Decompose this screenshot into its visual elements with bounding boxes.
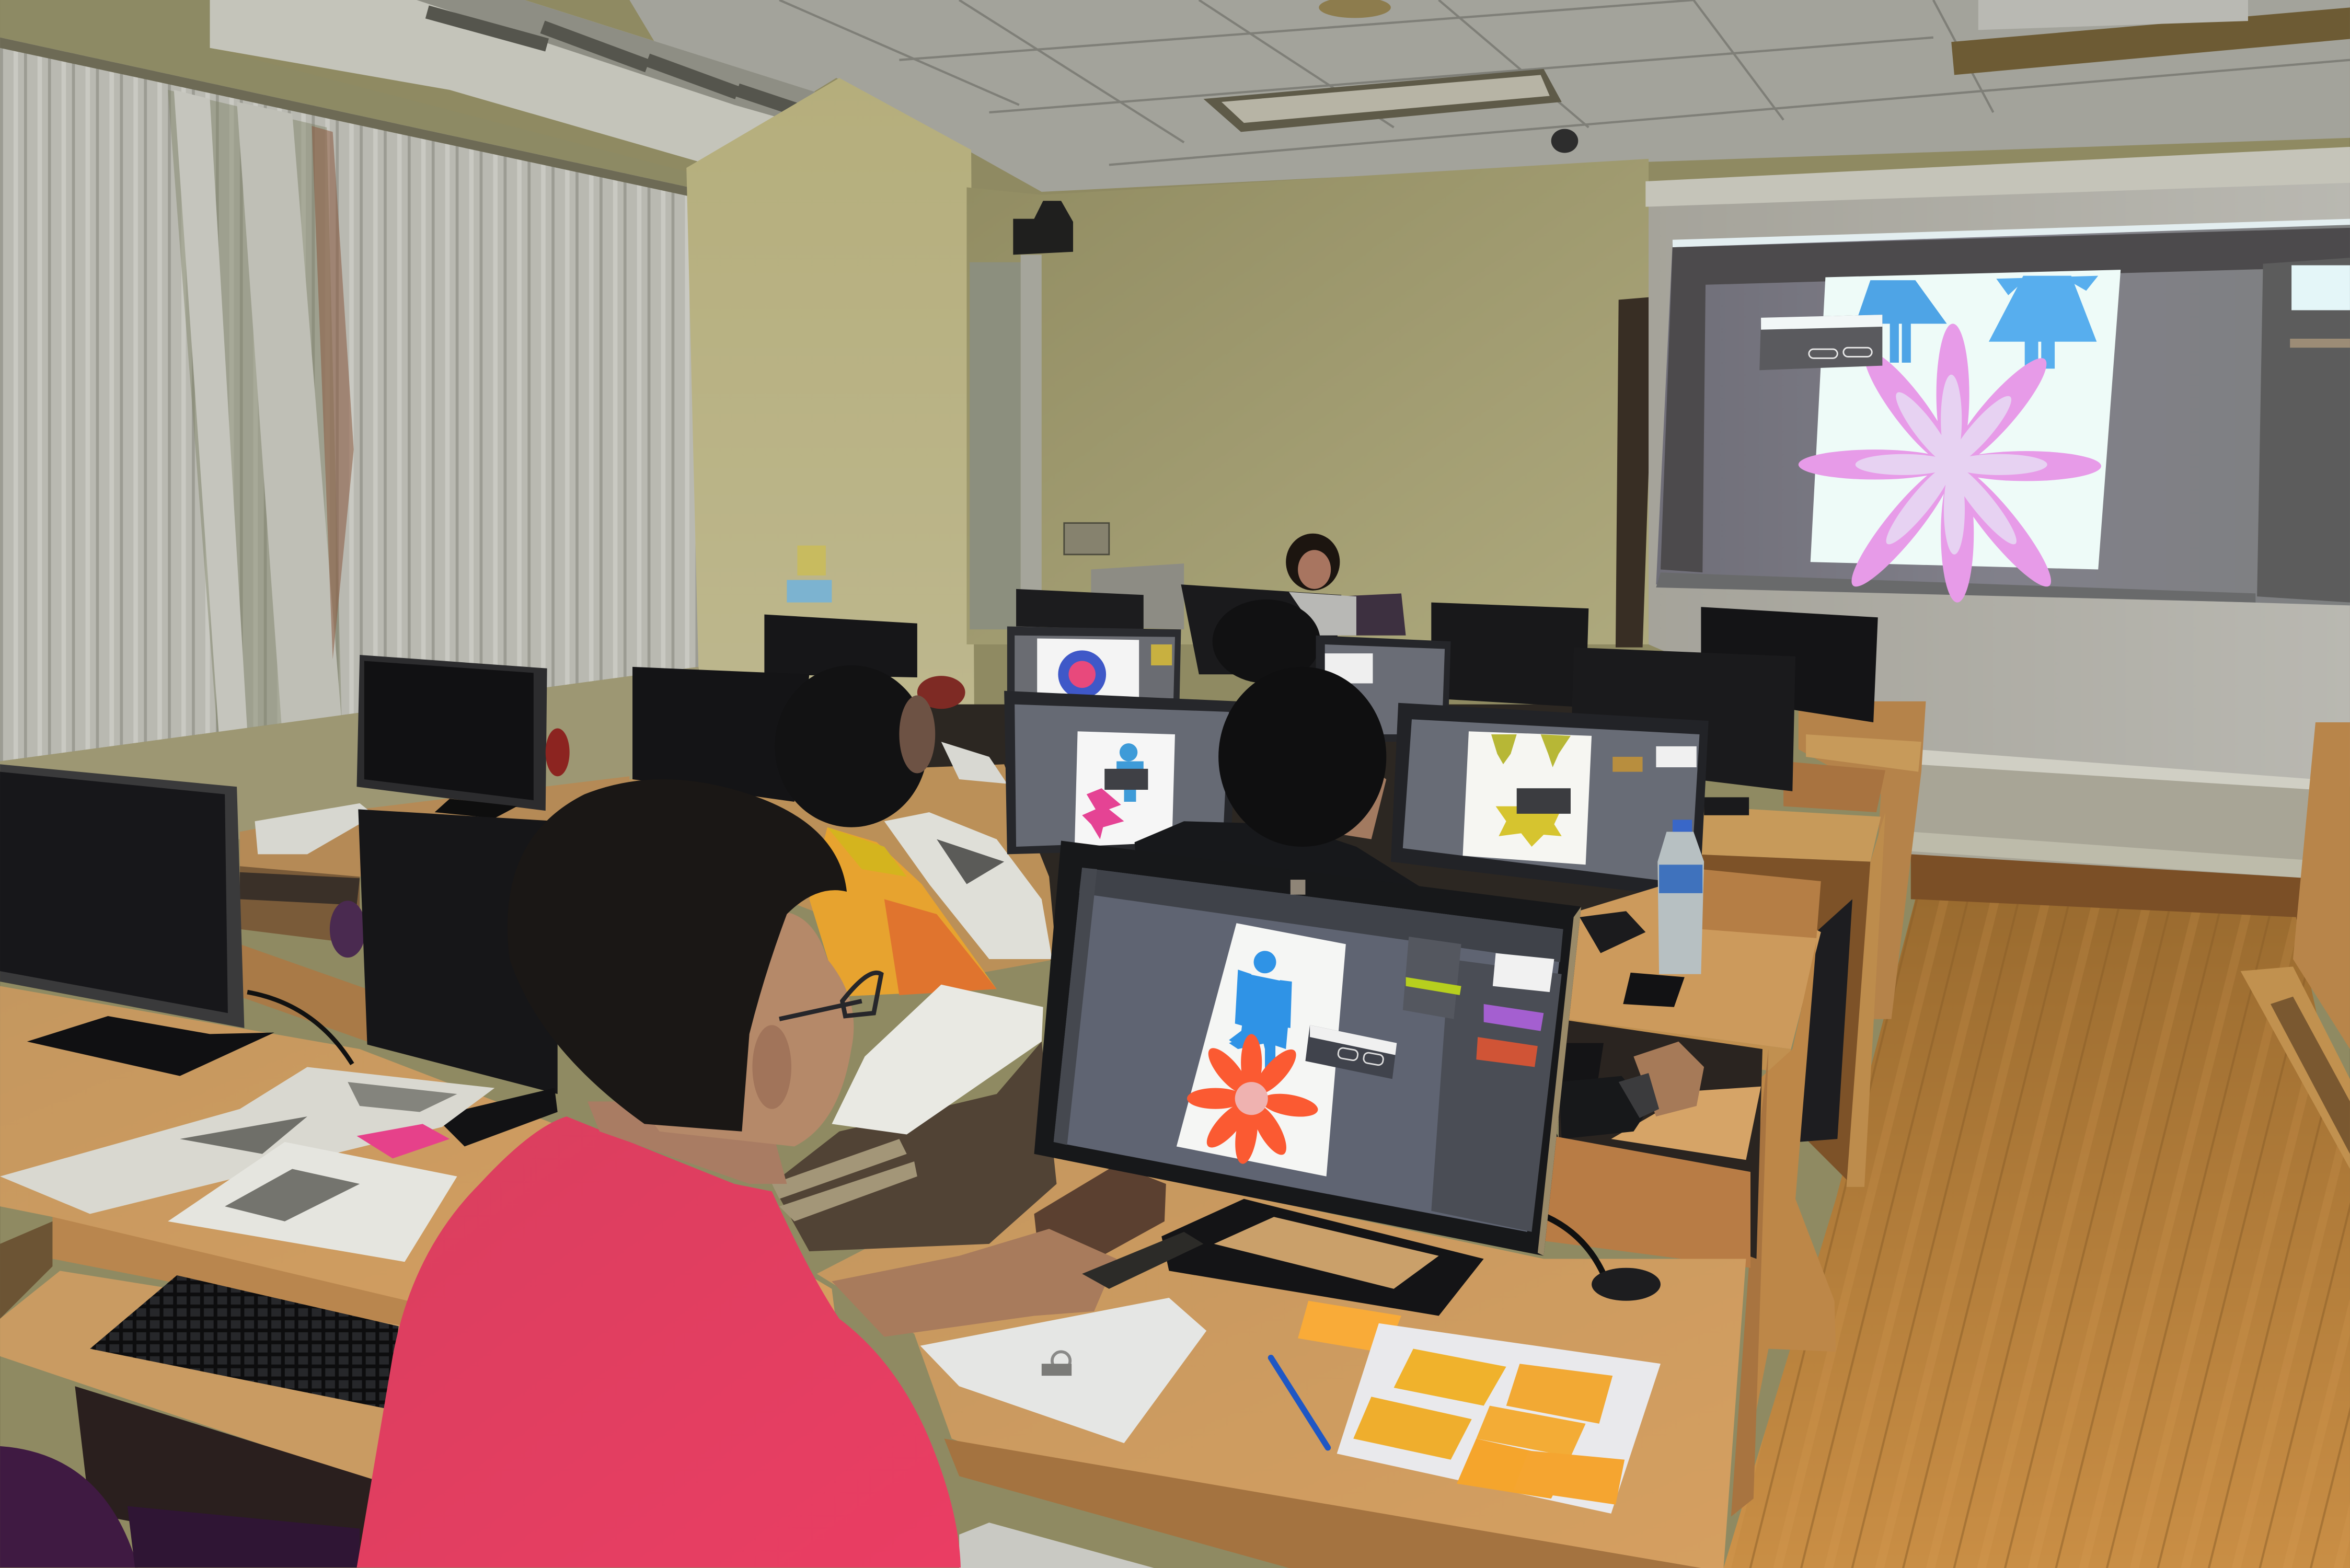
back right monitors (1431, 603, 1878, 815)
foreground monitor (1034, 841, 1581, 1256)
projected artboard (1811, 270, 2121, 570)
left monitor second row (356, 655, 547, 818)
back curtain (970, 262, 1021, 629)
back desks row right (1694, 701, 1926, 1187)
shelf under screen (1911, 750, 2316, 921)
left desk surface (0, 986, 839, 1567)
ceiling light right (1951, 0, 2350, 75)
projected dialog box (1759, 315, 1882, 370)
ear (752, 1025, 791, 1109)
foreground monitor stand (1161, 1199, 1661, 1316)
left papers (0, 1067, 494, 1262)
far monitor left back (764, 615, 917, 677)
foreground keyboard left (90, 1275, 399, 1409)
red chair backs (546, 676, 965, 776)
left back desks (240, 776, 629, 1042)
projected software window (1656, 219, 2350, 605)
backpack (772, 1042, 1056, 1251)
purple chair (0, 1446, 360, 1567)
blue pen (1271, 1358, 1328, 1448)
monitor stand right (1580, 911, 1645, 953)
keyboard tray with hand (1559, 1042, 1761, 1160)
purple stool left (330, 901, 366, 958)
foreground keyboard bottom (959, 1523, 1154, 1568)
orange flower on foreground screen (1187, 1034, 1320, 1165)
person with dark hair behind (1213, 599, 1320, 683)
dark tower under desk (1559, 1019, 1762, 1259)
monitor centre back row (632, 667, 809, 802)
pillar (686, 78, 974, 705)
desk partition side right (1731, 941, 1836, 1517)
wall speaker (1013, 201, 1073, 255)
projected blue figure one (1856, 280, 1947, 363)
hair (508, 779, 847, 1132)
back wall (966, 159, 1649, 644)
instructor (1286, 534, 1406, 636)
foreground desk top (817, 1154, 1746, 1568)
far computer and instructor desk (1016, 563, 1341, 674)
air conditioner (210, 0, 829, 164)
dark door post (1616, 297, 1655, 648)
projected pink flower (1799, 324, 2101, 603)
wall post (1021, 255, 1042, 629)
ceiling tiles (629, 0, 2350, 192)
neck (588, 1101, 787, 1184)
foreground artboard (1177, 923, 1346, 1177)
HP logo (1291, 880, 1305, 895)
right side bench (2241, 722, 2350, 1169)
water bottle (1657, 820, 1704, 974)
left foreground monitor (0, 764, 352, 1076)
wooden box (1034, 1165, 1166, 1262)
red shirt (356, 1116, 961, 1567)
active monitor back centre (1007, 627, 1181, 701)
notice stickers (787, 546, 832, 603)
projected blue figure two (1989, 276, 2098, 368)
person in yellow shirt (775, 665, 997, 997)
phone on desk (1623, 973, 1685, 1007)
back row dark furniture (914, 705, 1649, 989)
projection screen (1645, 147, 2350, 787)
wall under curtains (0, 667, 705, 839)
forearm (832, 1229, 1116, 1337)
wood floor (1723, 899, 2350, 1568)
active monitor centre with blue figure (1004, 691, 1238, 854)
person in black jacket (1135, 667, 1559, 1139)
notebook on desk (920, 1298, 1206, 1443)
man in red polo (356, 779, 1203, 1567)
desk surface mid right (1559, 869, 1821, 1073)
wall panel (1064, 523, 1109, 555)
left wall top (0, 0, 693, 764)
security camera (1551, 129, 1578, 153)
ceiling spot (1319, 0, 1391, 18)
open paper over backpack (832, 985, 1043, 1135)
blue figure on foreground screen (1229, 951, 1292, 1079)
face (625, 911, 854, 1146)
active monitor right with yellow star (1391, 703, 1709, 899)
window curtains (0, 38, 698, 762)
glasses (779, 973, 881, 1019)
ceiling light left (1203, 69, 1562, 132)
papers on back desk (884, 742, 1052, 959)
back row desk strip (629, 764, 1056, 974)
dialog on foreground screen (1305, 1025, 1397, 1079)
wood partition behind foreground desk (1543, 1136, 1750, 1268)
paper with sticky notes (1337, 1323, 1661, 1514)
orange sticky note (1298, 1301, 1401, 1353)
phone in hand (1082, 1232, 1203, 1289)
monitor back second row (358, 809, 558, 1146)
active monitor back right (1316, 636, 1451, 742)
